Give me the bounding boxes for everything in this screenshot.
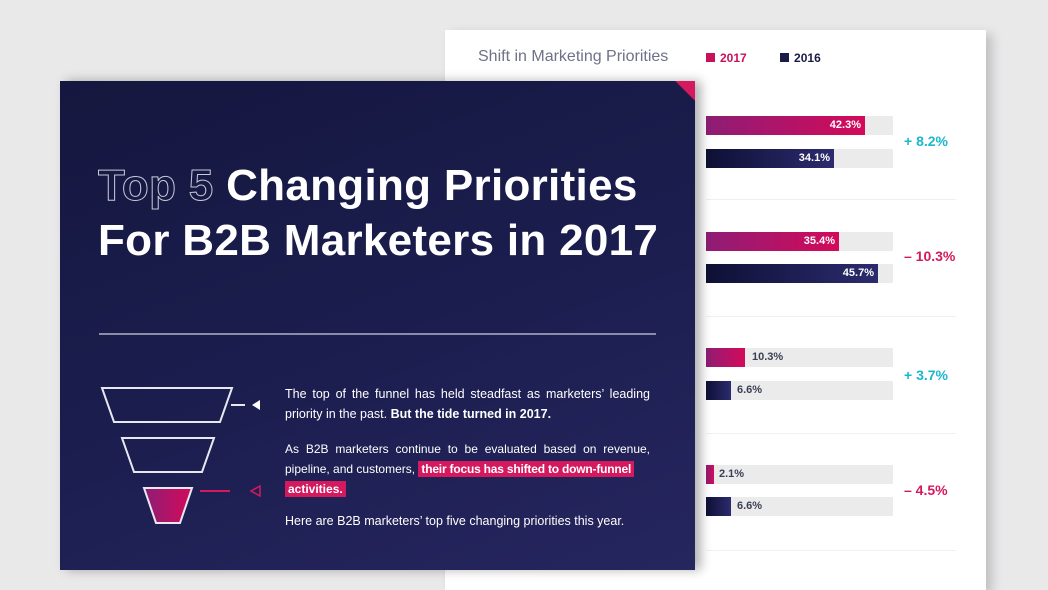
bar chart: + 8.2%	[904, 133, 948, 149]
divider	[99, 333, 656, 335]
text block: highlight	[285, 442, 650, 497]
text block: The top of the funnel has held steadfast as marketers’ leading priority in the past. But the tide turned in 2017.	[285, 387, 650, 421]
bar chart: 35.4%	[804, 235, 835, 247]
text block: closing: Here are B2B marketers’ top five changing priorities this year.	[285, 514, 624, 528]
bar chart: 2.1%	[719, 468, 744, 480]
bar chart: 6.6%	[737, 500, 762, 512]
chart legend title: Shift in Marketing Priorities	[478, 48, 668, 65]
corner accent	[675, 61, 715, 101]
bar chart: 10.3%	[752, 351, 783, 363]
bar chart: – 10.3%	[904, 248, 955, 264]
bar chart: + 3.7%	[904, 367, 948, 383]
text block: highlight: As B2B marketers continue to be evaluated based on revenue, pipeline, and customers, their focus has shifted to down-funnel	[285, 442, 650, 476]
text block: highlight: activities.	[288, 482, 343, 496]
bar chart: 45.7%	[843, 267, 874, 279]
icon: funnel	[100, 387, 261, 524]
bar chart: 34.1%	[799, 152, 830, 164]
bar chart: 42.3%	[830, 119, 861, 131]
title: For B2B Marketers in 2017	[98, 216, 658, 265]
bar chart: 6.6%	[737, 384, 762, 396]
chart card	[445, 30, 986, 590]
bar chart: – 4.5%	[904, 482, 948, 498]
legend: 2017 2016	[720, 51, 821, 65]
panel: intro	[60, 81, 695, 570]
title	[98, 168, 658, 265]
